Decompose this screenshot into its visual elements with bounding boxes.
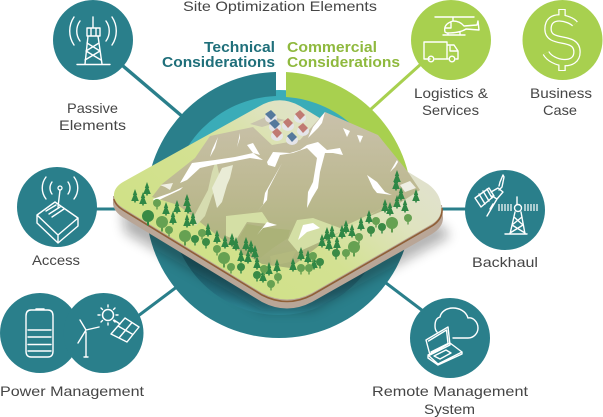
light teal inner ring [164,90,394,205]
panel: business case [522,0,602,118]
label: remote management system [372,383,528,417]
heading: commercial considerations [287,40,400,71]
slab shadow [122,205,450,310]
icon: wind and solar [64,293,144,373]
connector: backhaul [435,208,467,210]
commercial considerations arc [286,72,412,205]
icon: satellite and tower [465,170,545,250]
label: passive elements [59,100,126,133]
connector: power management [138,286,178,316]
label: access: Access [32,252,80,268]
brown edge [114,199,442,302]
panel: logistics and services [411,0,491,118]
panel: passive elements [53,0,133,133]
forest trees [131,170,420,290]
label: business case: Business [530,85,592,101]
label: logistics and services: Services [422,102,479,118]
connector: access [96,208,125,210]
heading: technical considerations: Considerations [162,55,275,71]
label: backhaul: Backhaul [472,254,538,270]
terrain slab [113,100,443,309]
village shadow streak [250,116,285,127]
label: logistics and services: Logistics & [414,85,489,101]
icon: helicopter and truck [411,0,491,80]
label: business case [530,85,592,118]
label: passive elements: Passive [67,100,118,116]
valley strips [226,212,270,240]
slab side [113,196,443,308]
lower teal half [146,205,412,338]
icon: wireless router [17,167,97,247]
icon: dollar sign [522,0,602,80]
central considerations disc [146,72,412,338]
label: business case: Case [543,102,577,118]
label: remote management system: Remote Management [372,383,528,399]
mountain silhouette [152,112,420,268]
lower facets [238,224,290,258]
panel: remote management system [372,298,528,417]
icon: cloud and laptop [410,298,490,378]
connector: passive elements [123,66,183,117]
connector: remote management [386,283,423,311]
label: passive elements: Elements [59,117,126,133]
mountain [152,112,420,268]
panel: access [17,167,97,268]
ground surface [114,100,441,300]
heading: commercial considerations: Considerations [287,55,400,71]
connector: logistics and services [370,64,421,110]
icon: cell tower [53,0,133,80]
panel: power management [0,293,144,399]
heading: technical considerations: Technical [204,40,275,56]
icon: battery [0,293,80,373]
label: remote management system: System [424,401,475,417]
label: power management: Power Management [0,383,144,399]
snow ridges [180,153,263,183]
heading: commercial considerations: Commercial [287,40,377,56]
heading: technical considerations [162,40,275,71]
technical considerations arc [146,72,276,205]
lower inner disc [170,205,388,315]
village houses [265,110,309,145]
label: logistics and services [414,85,489,118]
panel: backhaul [465,170,545,270]
